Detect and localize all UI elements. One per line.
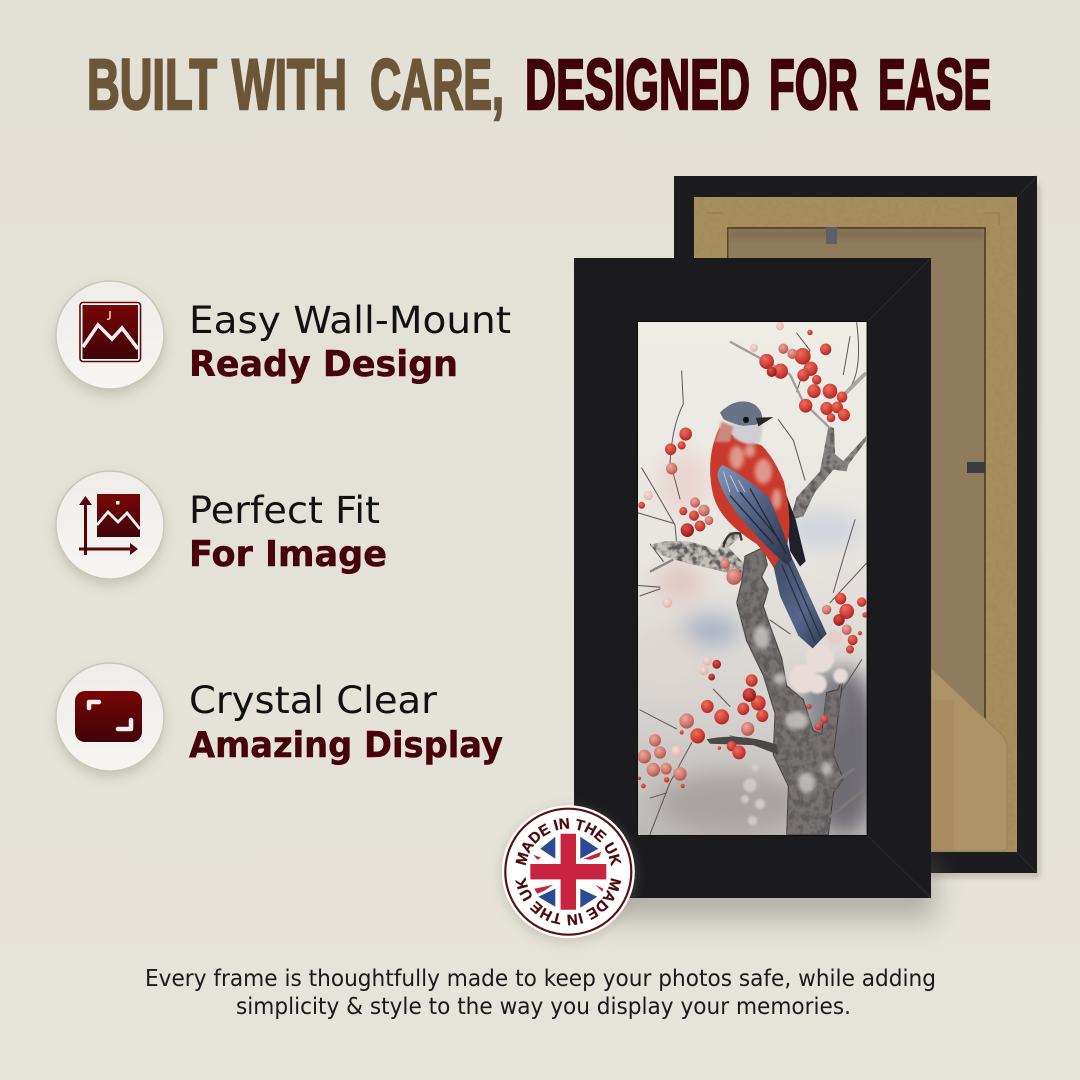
blossoms xyxy=(789,630,848,694)
red body xyxy=(710,428,789,567)
paper wash xyxy=(638,322,867,835)
icon disc: crystal clear xyxy=(56,663,164,777)
trunk xyxy=(737,547,843,835)
feature: perfect fit xyxy=(56,471,387,585)
side turn button xyxy=(967,462,985,473)
dark berries xyxy=(681,367,845,702)
front frame shadow xyxy=(610,860,935,920)
footer caption: simplicity & style to the way you display your memories. xyxy=(236,994,851,1020)
trunk highlights xyxy=(754,626,832,793)
union flag xyxy=(530,834,606,910)
pale berries xyxy=(644,322,784,758)
beak xyxy=(756,417,773,426)
title: BUILT xyxy=(87,46,217,125)
dark wing tips xyxy=(786,496,806,566)
bird xyxy=(710,401,827,648)
title: DESIGNED xyxy=(525,46,750,125)
made in the UK badge xyxy=(498,804,640,946)
upper branch xyxy=(790,426,866,520)
text: ready design: Ready Design xyxy=(189,344,458,385)
kickstand flap xyxy=(931,668,1007,851)
red berries xyxy=(638,330,868,788)
text: easy wall-mount: Easy Wall-Mount xyxy=(189,299,511,342)
feature: crystal clear xyxy=(56,663,503,777)
framed painting xyxy=(637,321,880,836)
footer caption xyxy=(145,966,936,1020)
title xyxy=(87,46,991,125)
thin twigs xyxy=(638,323,867,834)
wing xyxy=(717,465,792,565)
badge text top: MADE IN THE UK xyxy=(515,818,622,866)
corner pressure marks xyxy=(707,213,999,225)
lower side branches xyxy=(830,769,866,817)
throat xyxy=(730,420,762,444)
icon disc: wall-mount xyxy=(56,281,164,395)
eye xyxy=(743,417,749,423)
pink berries xyxy=(638,343,852,781)
title: EASE xyxy=(878,46,991,125)
back of frame xyxy=(674,176,1040,878)
perch claw xyxy=(723,533,742,547)
text: perfect fit: Perfect Fit xyxy=(189,489,380,532)
board recess xyxy=(727,227,986,722)
title: WITH xyxy=(232,46,347,125)
tail xyxy=(774,558,827,648)
feature: wall-mount xyxy=(56,281,511,395)
bokeh dots xyxy=(741,765,765,825)
title: CARE, xyxy=(370,46,504,125)
hanger slot xyxy=(826,227,837,244)
breast mottling xyxy=(729,444,781,509)
title: FOR xyxy=(769,46,858,125)
text: for image: For Image xyxy=(189,534,387,575)
badge text bottom: MADE IN THE UK xyxy=(515,877,622,926)
front frame xyxy=(574,258,931,898)
left branch xyxy=(650,532,745,582)
text: amazing display: Amazing Display xyxy=(189,725,503,766)
footer caption: Every frame is thoughtfully made to keep your photos safe, while adding xyxy=(145,966,936,992)
icon disc: perfect fit xyxy=(56,471,164,585)
text: crystal clear: Crystal Clear xyxy=(189,679,438,722)
head cap xyxy=(720,401,762,426)
backing board xyxy=(694,197,1017,852)
